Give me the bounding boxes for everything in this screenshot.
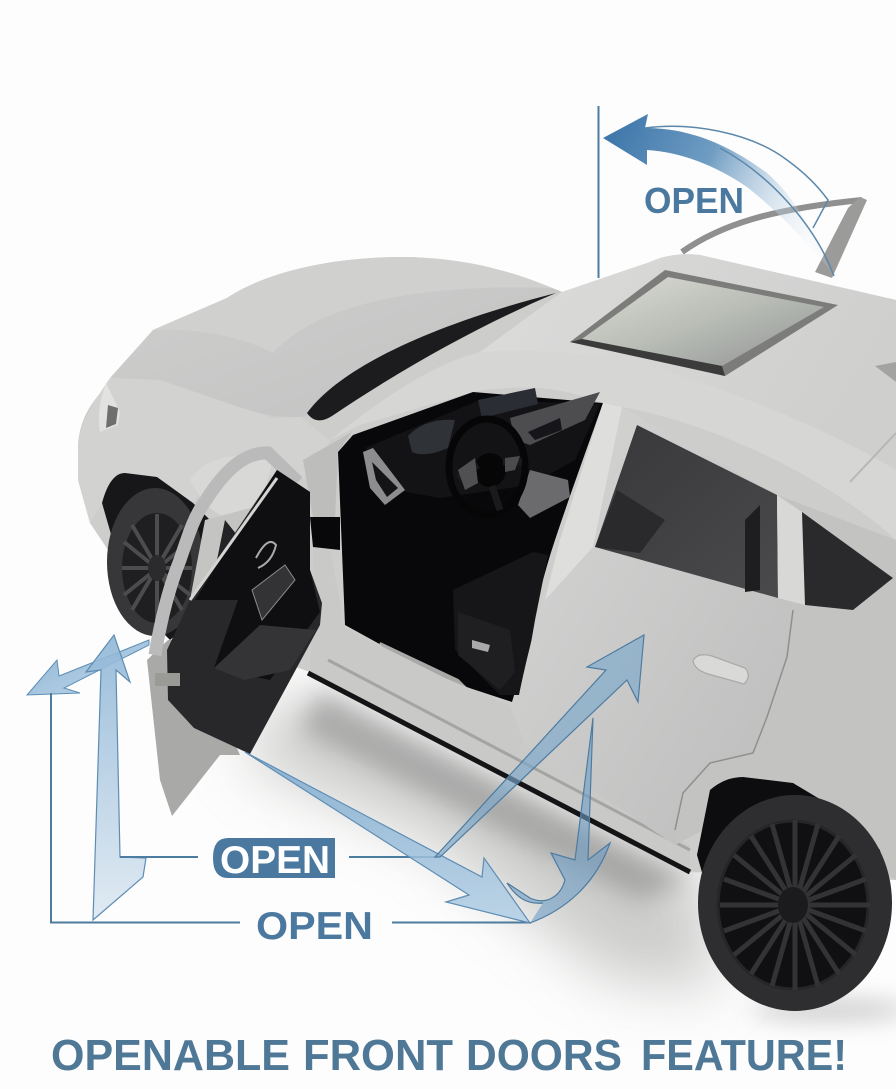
floor shadow [240, 690, 896, 1020]
title: FEATURE! [641, 1031, 847, 1080]
window switches [252, 565, 295, 620]
hood crease highlight [153, 257, 552, 353]
top arrow [603, 114, 834, 276]
label: lower open: OPEN [256, 905, 373, 948]
console panel [518, 470, 570, 518]
headlight [99, 383, 120, 432]
hinge gap [310, 517, 340, 550]
roof vent [875, 362, 896, 382]
b-pillar [545, 403, 622, 600]
front seat [453, 552, 548, 695]
door sill [308, 547, 690, 872]
label: top open: OPEN [644, 180, 744, 221]
carbon trim [510, 392, 600, 445]
roof panel [480, 254, 896, 470]
hinge pin [155, 673, 180, 686]
label: pill open: OPEN [220, 839, 330, 882]
rear closed door [518, 403, 793, 845]
interior cabin [338, 388, 603, 702]
title: FRONT [303, 1031, 453, 1080]
title: OPENABLE [51, 1031, 290, 1080]
inner door panel [167, 470, 322, 754]
front wheel [102, 473, 235, 640]
side window [595, 425, 778, 598]
left arrow pointing outward [27, 640, 149, 695]
left vent [363, 448, 405, 505]
seat control [472, 640, 490, 652]
pull handle [214, 625, 316, 680]
car body [78, 254, 896, 880]
front fender [78, 378, 330, 523]
dashboard [365, 400, 600, 498]
hood [110, 257, 562, 417]
steering wheel [449, 419, 525, 515]
windshield wiper recess [307, 293, 556, 420]
a-pillar stub by hinge [303, 432, 352, 518]
guide lines [51, 693, 530, 922]
long arrow to lower right [245, 752, 530, 923]
title [51, 1031, 847, 1080]
side mirror and body seen through window [190, 455, 272, 525]
left arrow pointing upward [86, 635, 146, 920]
arrow to upper right [435, 635, 644, 857]
door lower skin [147, 640, 240, 816]
infotainment screen [478, 388, 538, 418]
rear quarter panel [675, 495, 896, 880]
vertical guide line [598, 106, 600, 278]
door handle [693, 655, 748, 684]
instrument cluster [408, 420, 455, 454]
front door opened [147, 453, 322, 816]
sunroof [570, 270, 838, 376]
window frame [155, 453, 298, 655]
car: far door frame raised over roof [682, 197, 867, 278]
door logo trim [256, 542, 276, 568]
rear wheel [697, 777, 892, 1011]
pillar between windows [777, 495, 805, 605]
rear roof seam [850, 433, 896, 482]
a-pillar and roof rail [330, 351, 896, 540]
title: DOORS [466, 1031, 622, 1080]
light edge along window sill [190, 478, 277, 600]
curved arrow [507, 718, 610, 923]
door sill plate [380, 643, 468, 690]
door shut line [675, 610, 793, 830]
